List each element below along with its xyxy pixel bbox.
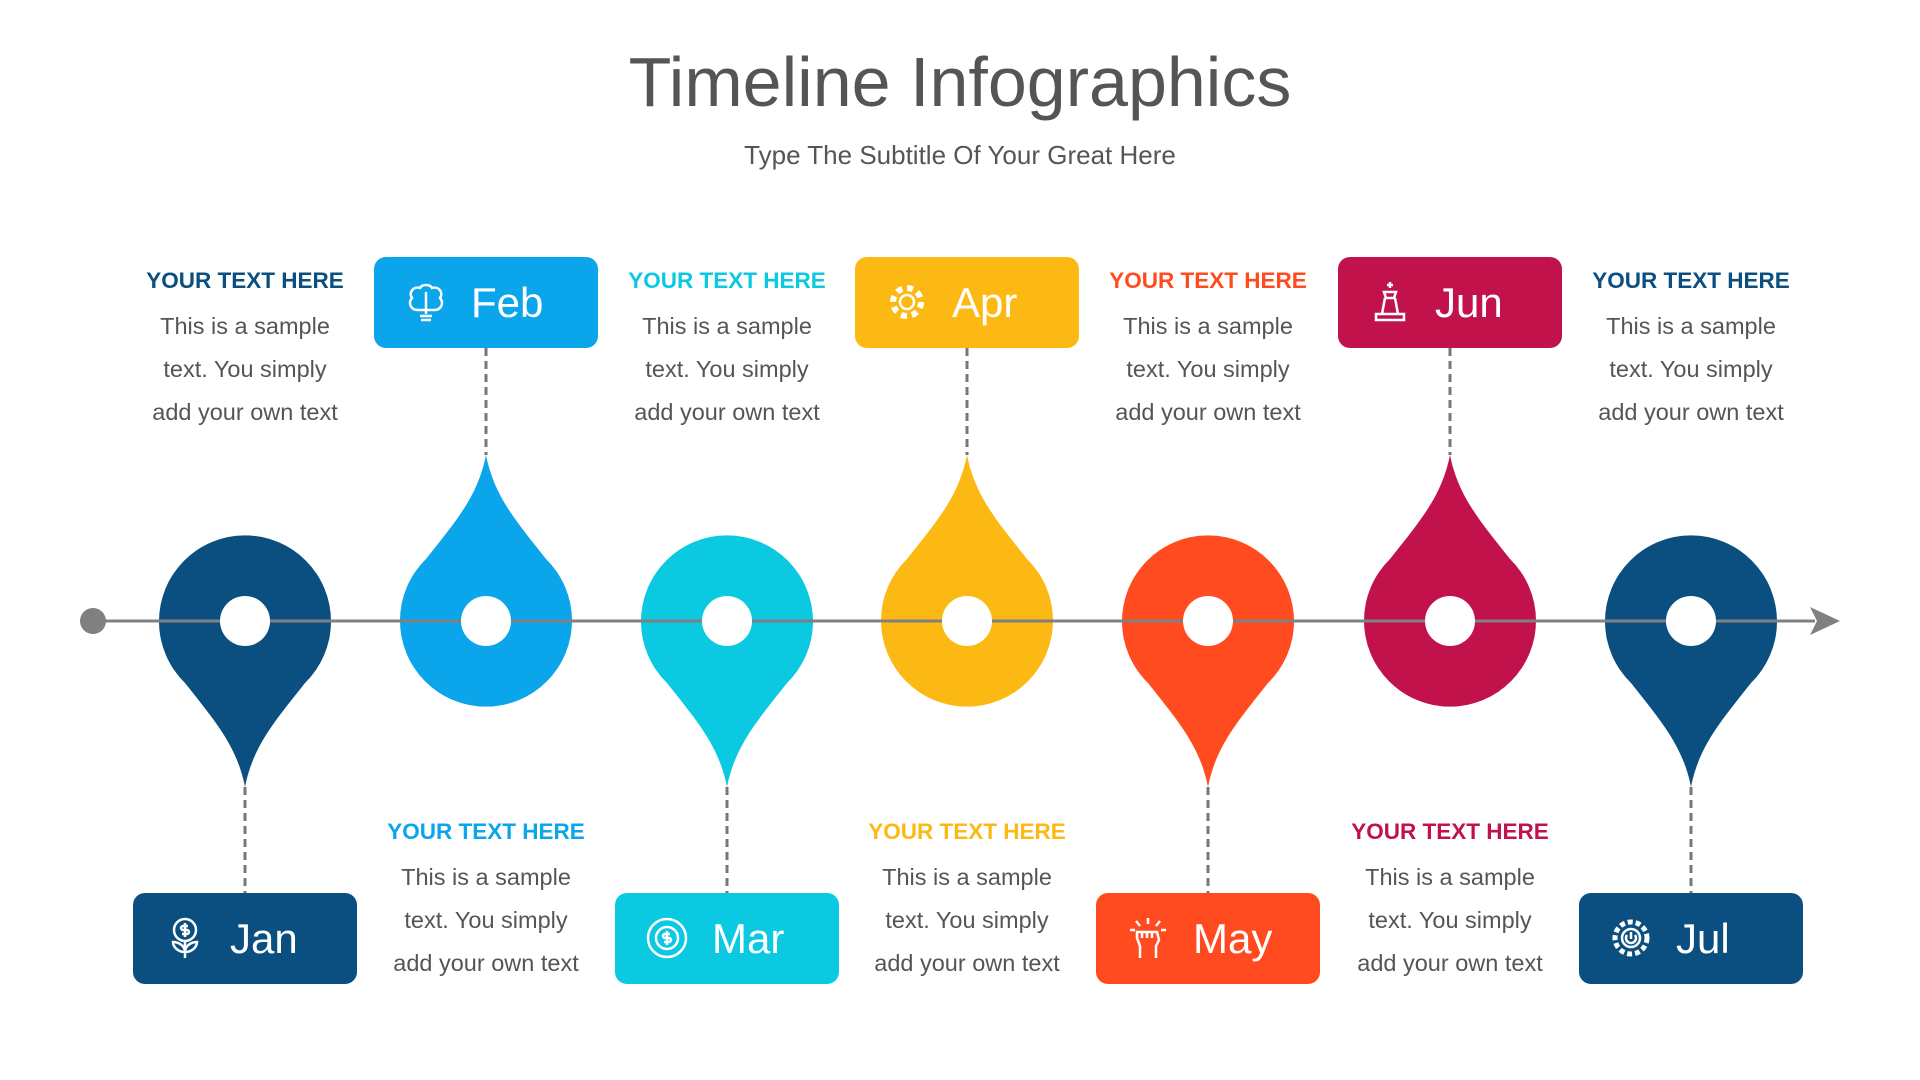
text: Jan	[146, 268, 344, 425]
pin: Jan	[159, 535, 331, 787]
text: Jan: YOUR TEXT HERE	[146, 268, 344, 293]
box: Jun: Jun	[1435, 279, 1503, 326]
text: Apr: add your own text	[874, 950, 1060, 976]
pin: Jun	[1364, 455, 1536, 707]
text: Jul: add your own text	[1598, 399, 1784, 425]
pin: Feb	[400, 455, 572, 707]
text: Jul: This is a sample	[1606, 313, 1776, 339]
text: Feb	[387, 819, 585, 976]
pin: Apr	[881, 455, 1053, 707]
pin: Mar	[641, 535, 813, 787]
text: Feb: text. You simply	[404, 907, 568, 933]
text: Mar: add your own text	[634, 399, 820, 425]
text: May: This is a sample	[1123, 313, 1293, 339]
box: May: May	[1193, 915, 1272, 962]
box: Feb: Feb	[471, 279, 543, 326]
text: May: YOUR TEXT HERE	[1109, 268, 1307, 293]
box: Apr: Apr	[952, 279, 1017, 326]
text: Jun: add your own text	[1357, 950, 1543, 976]
pin: Jul	[1605, 535, 1777, 787]
text: Jan: This is a sample	[160, 313, 330, 339]
text: Apr: text. You simply	[885, 907, 1049, 933]
text: Jul: text. You simply	[1609, 356, 1773, 382]
text: Apr: YOUR TEXT HERE	[868, 819, 1066, 844]
text: Jul: YOUR TEXT HERE	[1592, 268, 1790, 293]
box: Jul: Jul	[1676, 915, 1730, 962]
text: May	[1109, 268, 1307, 425]
box: Jul	[1579, 893, 1803, 984]
title: Timeline Infographics	[629, 43, 1291, 121]
text: May: text. You simply	[1126, 356, 1290, 382]
text: Apr	[868, 819, 1066, 976]
text: Jan: text. You simply	[163, 356, 327, 382]
text: Jan: add your own text	[152, 399, 338, 425]
text: Jul	[1592, 268, 1790, 425]
text: Jun: YOUR TEXT HERE	[1351, 819, 1549, 844]
subtitle: Type The Subtitle Of Your Great Here	[744, 140, 1176, 170]
box: Apr	[855, 257, 1079, 348]
text: Jun: This is a sample	[1365, 864, 1535, 890]
box: Feb	[374, 257, 598, 348]
text: Mar: This is a sample	[642, 313, 812, 339]
text: Jun	[1351, 819, 1549, 976]
box: Mar: Mar	[712, 915, 784, 962]
text: Jun: text. You simply	[1368, 907, 1532, 933]
pin: May	[1122, 535, 1294, 787]
text: Feb: YOUR TEXT HERE	[387, 819, 585, 844]
box: Mar	[615, 893, 839, 984]
timeline axis arrow	[80, 607, 1840, 635]
box: May	[1096, 893, 1320, 984]
text: Feb: This is a sample	[401, 864, 571, 890]
box: Jun	[1338, 257, 1562, 348]
text: Apr: This is a sample	[882, 864, 1052, 890]
box: Jan: Jan	[230, 915, 298, 962]
text: May: add your own text	[1115, 399, 1301, 425]
text: Feb: add your own text	[393, 950, 579, 976]
text: Mar	[628, 268, 826, 425]
box: Jan	[133, 893, 357, 984]
text: Mar: YOUR TEXT HERE	[628, 268, 826, 293]
text: Mar: text. You simply	[645, 356, 809, 382]
